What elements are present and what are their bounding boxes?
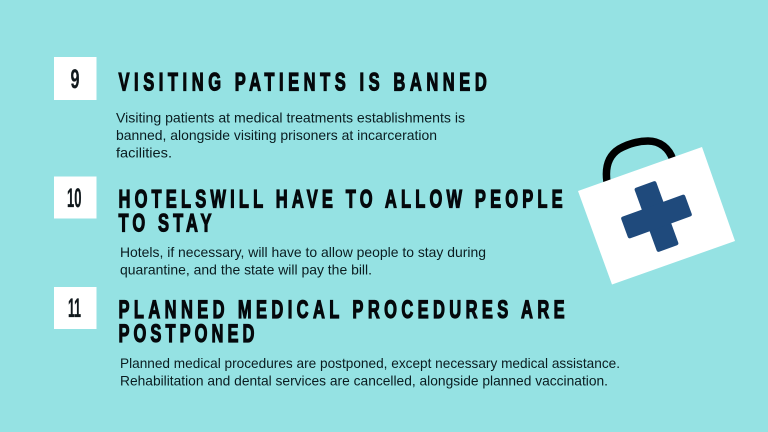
item 11: planned procedures <box>54 287 620 388</box>
body text 11 <box>120 355 620 388</box>
number badge 10 <box>54 176 96 218</box>
heading 10: HOTELSWILL HAVE TO ALLOW PEOPLE <box>118 186 563 213</box>
item 10: hotels <box>54 176 563 278</box>
bag body <box>578 147 735 284</box>
number badge 10: 10 <box>67 183 82 213</box>
icon: medical bag <box>578 141 735 284</box>
body text 9: facilities. <box>116 144 172 160</box>
number badge 9: 9 <box>70 64 80 94</box>
heading 11: POSTPONED <box>118 321 254 348</box>
heading 10 <box>118 186 563 237</box>
bag handle <box>606 141 673 182</box>
body text 11: Rehabilitation and dental services are cancelled, alongside planned vaccination. <box>120 372 608 388</box>
body text 10: quarantine, and the state will pay the bill. <box>120 262 372 278</box>
heading 9: VISITING PATIENTS IS BANNED <box>118 69 487 96</box>
number badge 11 <box>54 287 96 329</box>
body text 9: banned, alongside visiting prisoners at incarceration <box>116 127 437 143</box>
body text 9: Visiting patients at medical treatments establishments is <box>116 110 465 126</box>
number badge 11: 11 <box>68 293 81 323</box>
body text 9 <box>116 110 465 160</box>
heading 10: TO STAY <box>118 210 212 237</box>
heading 11: PLANNED MEDICAL PROCEDURES ARE <box>118 297 565 324</box>
item 9: visiting patients <box>54 57 487 160</box>
body text 10: Hotels, if necessary, will have to allow people to stay during <box>120 244 486 260</box>
body text 10 <box>120 244 486 278</box>
number badge 9 <box>54 57 96 100</box>
medical cross <box>613 173 700 260</box>
body text 11: Planned medical procedures are postponed, except necessary medical assistance. <box>120 355 620 371</box>
heading 11 <box>118 297 565 348</box>
